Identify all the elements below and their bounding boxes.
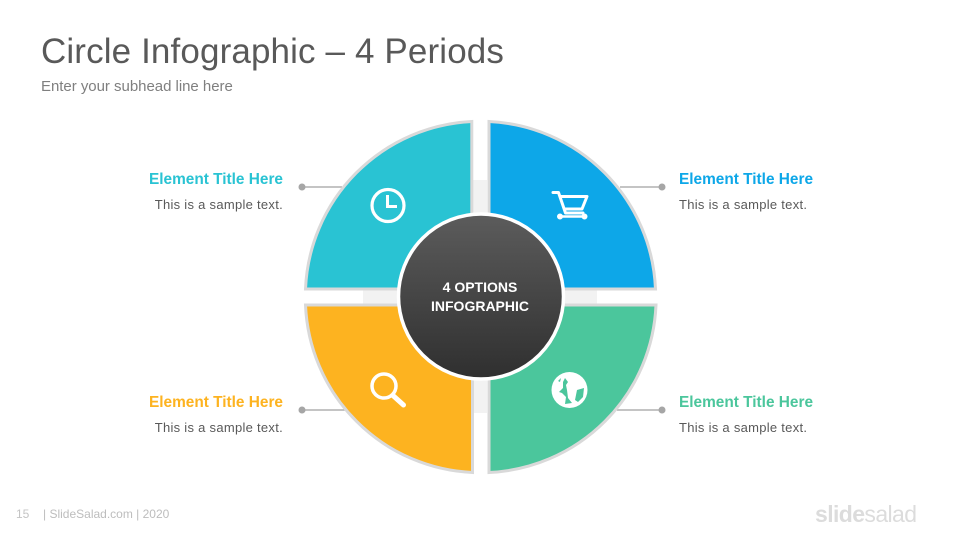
leader line: bottom right <box>617 406 666 414</box>
callout title: Element Title Here <box>149 394 283 411</box>
icon: magnifier <box>372 374 404 405</box>
background cross <box>363 180 597 413</box>
footer text: | SlideSalad.com | 2020 <box>43 507 169 521</box>
callout title: Element Title Here <box>679 171 813 188</box>
callout: bottom left <box>149 394 283 435</box>
icon: clock <box>372 190 404 222</box>
segment: bottom left <box>306 305 472 472</box>
center circle <box>398 214 564 379</box>
callout title: Element Title Here <box>679 394 813 411</box>
callout: bottom right <box>679 394 813 435</box>
segment: bottom right <box>489 305 656 472</box>
center label <box>431 279 529 314</box>
icon: cart <box>553 192 587 219</box>
subhead: Enter your subhead line here <box>41 78 233 95</box>
footer page number: 15 <box>16 507 29 521</box>
center label: INFOGRAPHIC <box>431 298 529 314</box>
callout text: This is a sample text. <box>679 197 807 212</box>
callout text: This is a sample text. <box>155 197 283 212</box>
leader line: top right <box>620 184 666 190</box>
callout: top right <box>679 171 813 212</box>
logo: slidesalad <box>815 501 916 527</box>
leader line: bottom left <box>298 406 345 414</box>
icon: globe <box>552 372 588 408</box>
callout title: Element Title Here <box>149 171 283 188</box>
leader line: top left <box>298 184 342 190</box>
callout text: This is a sample text. <box>155 420 283 435</box>
callout: top left <box>149 171 283 212</box>
segment: top left <box>306 122 472 289</box>
callout text: This is a sample text. <box>679 420 807 435</box>
segment: top right <box>489 122 656 289</box>
title: Circle Infographic – 4 Periods <box>41 32 504 71</box>
center label: 4 OPTIONS <box>443 279 517 295</box>
